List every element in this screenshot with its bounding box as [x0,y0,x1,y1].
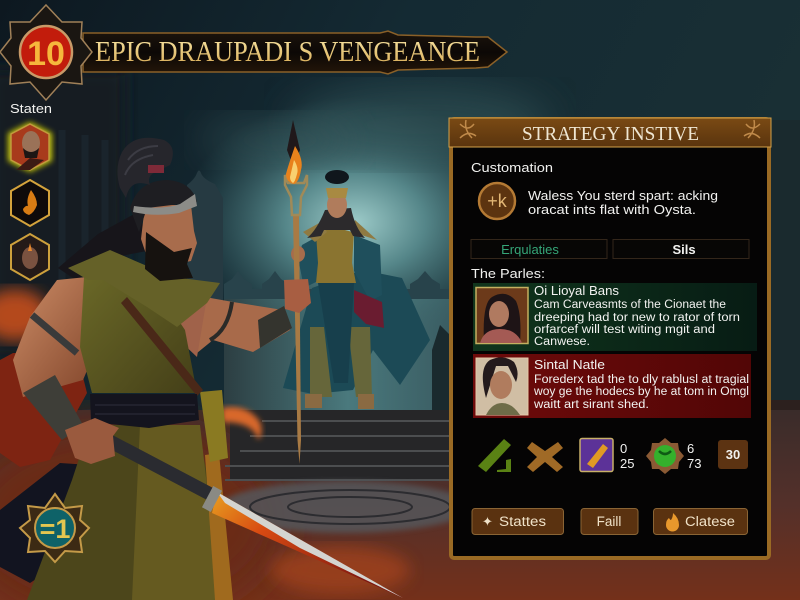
man right wrist guard [258,306,292,348]
tab: erqulaties [471,240,607,258]
icon: coin: +k [487,191,508,211]
man headband [133,194,197,215]
woman cape [283,270,430,394]
warrior man [0,138,403,600]
man chest [160,297,207,357]
man scarf [68,250,220,327]
banner title: EPIC DRAUPADI S VENGEANCE [95,36,480,68]
orb stat: 73 [687,456,701,471]
warrior woman [283,170,430,409]
stone steps [225,410,450,480]
header banner [0,5,507,100]
customation description: Waless You sterd spart: acking [528,189,718,203]
bottom level badge: =1 [40,514,70,544]
woman maroon cloth [354,290,384,328]
man long hair [58,212,152,280]
portrait: woman on light background [476,357,528,415]
badge: thirty: 30 [726,447,740,462]
card text: Forederx tad the to dly rablusl at tragial [534,374,749,386]
man skirt [27,425,233,600]
man head hair [130,180,197,232]
customation description [528,189,718,217]
floor carved circles [220,481,470,533]
orb stat: 6 [687,441,694,456]
card text: waitt art sirant shed. [533,399,649,411]
banner medallion [0,5,92,100]
man sash [90,394,199,428]
flame hero icon [11,180,49,226]
icon: green pencil [478,439,511,472]
item stat: 0 [620,441,627,456]
woman skirt [318,283,354,383]
spear with flame [285,120,307,464]
button: stattes: ✦ [482,514,493,529]
man left hand [65,418,119,464]
card text: woy ge the hodecs by he at tom in Omgl [533,386,749,398]
panel header [449,118,771,147]
man pouch [200,390,228,462]
button: faill: Faill [597,514,621,529]
man upper arm left [13,277,103,397]
button: stattes: Stattes [499,514,546,529]
button: clatese [654,508,748,534]
tab: sils [613,240,749,258]
sword blade [212,492,403,598]
card text: Cam Carveasmts of the Cionaet the [534,299,726,311]
woman sleeves [298,235,382,301]
banner medallion: 10 [27,35,65,73]
icon: green orb [646,438,684,474]
man right fist [284,279,311,313]
card text [533,374,749,411]
portrait: woman with dark hair [476,288,528,344]
tab: erqulaties: Erqulaties [501,242,559,257]
card text: Canwese. [534,336,590,348]
icon: crossed bones [527,442,563,472]
bottom level badge [20,494,89,562]
man armlet [32,315,77,353]
woman hero icon [11,234,49,280]
man left forearm guard [23,375,83,440]
panel: strategy [449,118,771,558]
side label: Staten [10,101,52,116]
icon: scroll item [580,438,613,472]
man red cape [0,353,87,467]
tab: sils: Sils [672,242,696,257]
woman bodice [316,229,356,283]
card text: dreeping had tor new to rator of torn [534,312,740,324]
banner bar [83,31,507,74]
man dark cloak [0,463,120,583]
woman boots [305,394,374,409]
card text [534,299,740,348]
card: sintal natle [473,354,751,418]
hero selector icons [8,122,52,280]
customation description: oracat ints flat with Oysta. [528,203,696,217]
woman trousers [310,327,372,397]
selected hero icon [8,122,52,172]
man topknot [117,138,173,198]
woman hair and head [307,208,365,238]
card text: orfarcef will test witing mgit and [534,324,715,336]
man tunic [80,263,197,393]
floor embers and flames [222,407,410,594]
badge: thirty [718,440,748,469]
card title: Sintal Natle [534,358,605,372]
item stat [620,441,634,471]
card: loyal bans [473,283,757,351]
item stat: 25 [620,456,634,471]
sword handle [95,429,215,501]
man right arm [197,297,290,353]
panel header: STRATEGY INSTIVE [522,123,699,145]
card title: Oi Lioyal Bans [534,284,619,298]
heading: customation: Customation [471,160,553,175]
panel frame [451,119,769,558]
orb stat [687,441,701,471]
button: clatese: Clatese [685,514,735,529]
heading: the parles: The Parles: [471,266,545,281]
man face [141,205,197,269]
button: stattes [472,508,564,534]
icon: coin [479,183,515,219]
button: faill [581,508,638,534]
man beard [145,232,193,281]
